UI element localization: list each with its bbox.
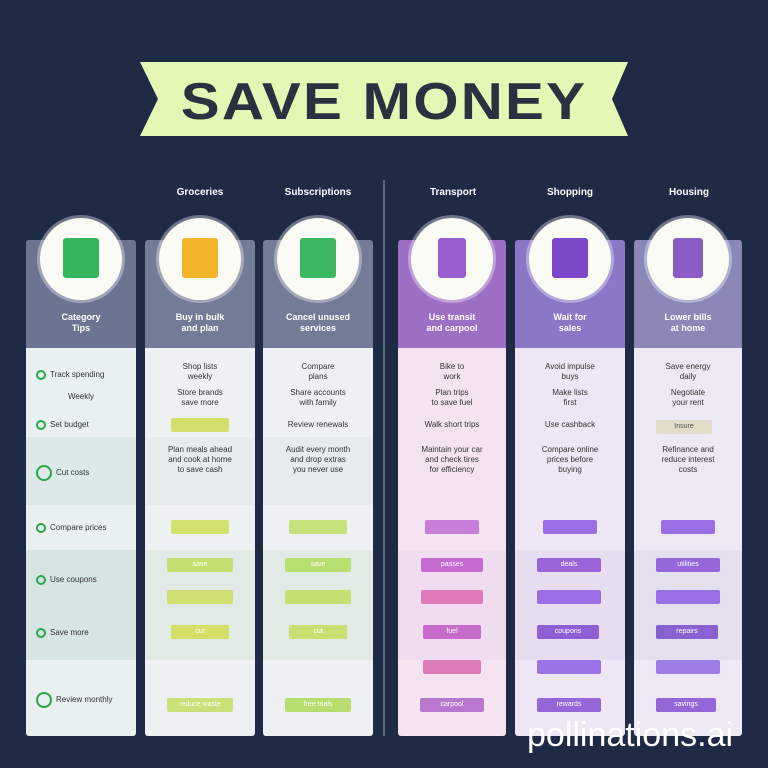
panel: column 3: Cancel unused: [286, 312, 350, 322]
panel: column 2: weekly: [188, 372, 212, 381]
panel: column 5: Make lists: [552, 388, 588, 397]
panel: column 6: utilities: [677, 561, 699, 568]
panel: column 6: [634, 240, 742, 736]
panel: column 3: and drop extras: [290, 455, 346, 464]
panel: column 5: first: [564, 398, 576, 407]
panel: column 1: Set budget: [50, 420, 89, 429]
panel: column 1: Weekly: [68, 392, 94, 401]
text: Shopping: [547, 187, 593, 198]
panel: column 5: Compare online: [542, 445, 598, 454]
icon: col5: [529, 218, 611, 300]
panel: column 6: repairs: [676, 628, 698, 635]
panel: column 1: Review monthly: [56, 695, 112, 704]
panel: column 1: [26, 240, 136, 736]
panel: column 2: cut: [195, 628, 205, 635]
panel: column 4: work: [444, 372, 460, 381]
panel: column 3: Review renewals: [288, 420, 348, 429]
panel: column 2: to save cash: [178, 465, 222, 474]
panel: column 5: prices before: [547, 455, 593, 464]
panel: column 1: Cut costs: [56, 468, 89, 477]
panel: column 3: you never use: [293, 465, 343, 474]
divider: [383, 180, 385, 736]
panel: column 2: reduce waste: [179, 701, 221, 708]
panel: column 2: Store brands: [177, 388, 223, 397]
panel: column 4: for efficiency: [430, 465, 474, 474]
panel: column 1: Save more: [50, 628, 89, 637]
panel: column 3: [263, 240, 373, 736]
panel: column 4: fuel: [446, 628, 458, 635]
panel: column 6: Insure: [674, 423, 694, 430]
column labels: Groceries: [177, 187, 223, 198]
icon: col6: [647, 218, 729, 300]
panel: column 3: with family: [299, 398, 337, 407]
panel: column 1: Compare prices: [50, 523, 106, 532]
panel: column 6: costs: [679, 465, 697, 474]
panel: column 4: [398, 240, 506, 736]
panel: column 2: [145, 240, 255, 736]
title banner: [140, 62, 628, 136]
panel: column 5: deals: [561, 561, 577, 568]
panel: column 5: Avoid impulse: [545, 362, 595, 371]
panel: column 6: Refinance and: [662, 445, 714, 454]
panel: column 2: save: [193, 561, 207, 568]
panel: column 2: save more: [181, 398, 219, 407]
panel: column 5: sales: [559, 323, 581, 333]
panel: column 5: buying: [558, 465, 582, 474]
panel: column 1: Tips: [72, 323, 90, 333]
panel: column 6: Negotiate: [671, 388, 705, 397]
text: Transport: [430, 187, 476, 198]
panel: column 3: plans: [308, 372, 328, 381]
panel: column 2: Shop lists: [183, 362, 217, 371]
panel: column 1: Category: [61, 312, 100, 322]
panel: column 3: free trials: [304, 701, 332, 708]
panel: column 3: save: [311, 561, 325, 568]
text: Subscriptions: [285, 187, 351, 198]
title banner: SAVE MONEY: [181, 73, 587, 131]
panel: column 4: Plan trips: [435, 388, 469, 397]
panel: column 4: Walk short trips: [425, 420, 479, 429]
panel: column 1: Track spending: [50, 370, 104, 379]
panel: column 6: at home: [671, 323, 705, 333]
panel: column 6: reduce interest: [662, 455, 714, 464]
panel: column 6: Lower bills: [664, 312, 712, 322]
panel: column 4: passes: [441, 561, 463, 568]
panel: column 6: your rent: [672, 398, 704, 407]
icon: col4: [411, 218, 493, 300]
panel: column 4: carpool: [441, 701, 463, 708]
panel: column 3: Share accounts: [290, 388, 346, 397]
panel: column 5: rewards: [557, 701, 581, 708]
panel: column 5: coupons: [555, 628, 581, 635]
watermark: pollinations.ai: [527, 716, 733, 754]
panel: column 6: Save energy: [666, 362, 710, 371]
panel: column 5: Use cashback: [545, 420, 595, 429]
panel: column 4: Use transit: [429, 312, 475, 322]
panel: column 5: buys: [562, 372, 578, 381]
panel: column 3: Compare: [302, 362, 334, 371]
panel: column 5: [515, 240, 625, 736]
text: Housing: [669, 187, 709, 198]
panel: column 3: cut: [313, 628, 323, 635]
panel: column 2: Buy in bulk: [176, 312, 224, 322]
icon: col3: [277, 218, 359, 300]
panel: column 6: daily: [680, 372, 696, 381]
icon: col2: [159, 218, 241, 300]
panel: column 3: services: [300, 323, 336, 333]
panel: column 4: Bike to: [440, 362, 464, 371]
panel: column 4: to save fuel: [432, 398, 472, 407]
panel: column 2: and plan: [181, 323, 218, 333]
panel: column 3: Audit every month: [286, 445, 350, 454]
panel: column 2: Plan meals ahead: [168, 445, 232, 454]
panel: column 4: and check tires: [425, 455, 479, 464]
panel: column 6: savings: [674, 701, 698, 708]
panel: column 4: Maintain your car: [421, 445, 483, 454]
panel: column 2: and cook at home: [168, 455, 232, 464]
icon: col1: [40, 218, 122, 300]
panel: column 1: Use coupons: [50, 575, 97, 584]
panel: column 4: and carpool: [426, 323, 478, 333]
panel: column 5: Wait for: [553, 312, 587, 322]
